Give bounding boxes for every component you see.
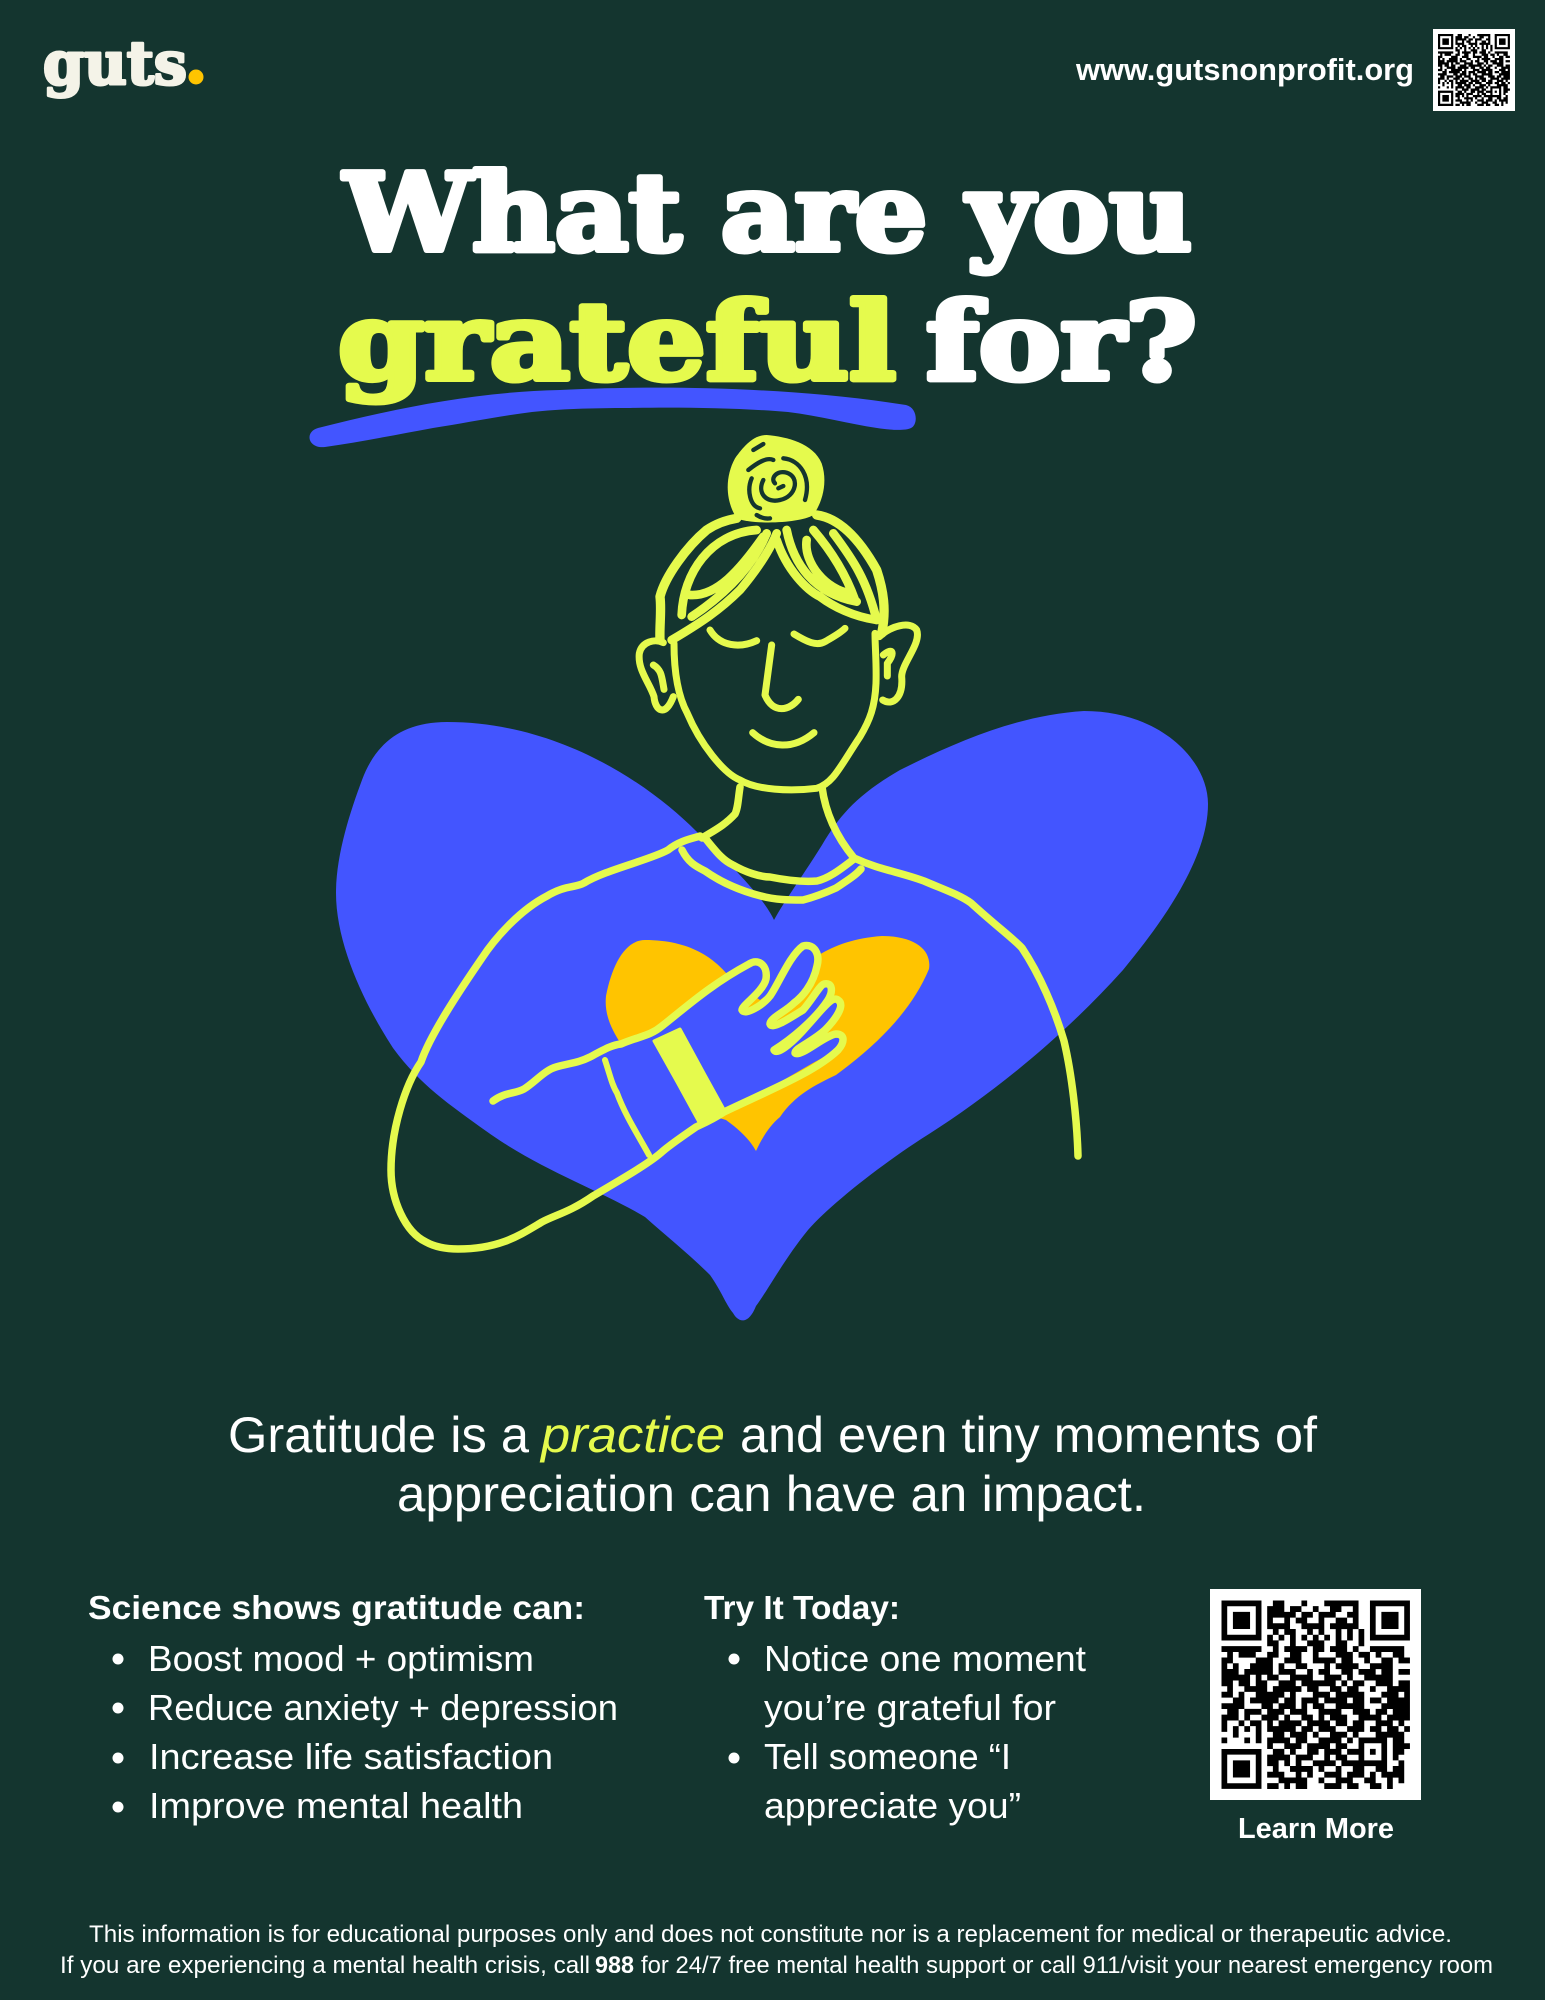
nose <box>765 645 798 709</box>
learn more label: Learn More <box>1238 1813 1394 1845</box>
hand fill <box>605 946 843 1155</box>
big blue heart <box>336 711 1208 1320</box>
panel: science shows gratitude can: Boost mood + optimism <box>148 1638 534 1679</box>
tagline: and even tiny moments of <box>740 1407 1317 1463</box>
panel: science shows gratitude can: Science shows gratitude can: <box>88 1589 585 1626</box>
footer disclaimer: 988 <box>595 1952 634 1979</box>
title <box>338 151 1197 405</box>
panel: science shows gratitude can: Improve mental health <box>149 1785 523 1826</box>
arm, hand and fingers <box>391 836 843 1249</box>
neck and right shoulder <box>702 787 1078 1156</box>
title: for? <box>926 280 1197 405</box>
right ear <box>879 625 917 702</box>
left ear <box>639 641 673 710</box>
footer disclaimer: If you are experiencing a mental health crisis, call <box>60 1952 590 1979</box>
collar <box>682 838 861 900</box>
footer disclaimer: This information is for educational purposes only and does not constitute nor is a replacement for medical or therapeutic advice. <box>89 1921 1452 1948</box>
title: What are you <box>343 151 1192 276</box>
left eye <box>710 630 757 645</box>
website url: www.gutsnonprofit.org <box>1075 52 1414 87</box>
tagline <box>228 1407 1317 1522</box>
hairline and strands <box>672 530 877 640</box>
panel: try it today: you’re grateful for <box>764 1687 1056 1728</box>
small qr code <box>1433 29 1515 111</box>
panel: try it today: Try It Today: <box>704 1589 900 1626</box>
title underline swoosh <box>310 388 916 447</box>
hair bun <box>728 435 824 522</box>
head <box>639 435 917 790</box>
small orange heart <box>606 936 929 1151</box>
sleeve cuff <box>605 1029 726 1155</box>
panel: try it today: appreciate you” <box>764 1785 1021 1826</box>
tagline: practice <box>539 1407 725 1463</box>
hair outline <box>660 515 884 640</box>
tagline: Gratitude is a <box>228 1407 529 1463</box>
panel: try it today <box>704 1589 1086 1826</box>
large qr code <box>1210 1589 1421 1800</box>
right eye <box>794 628 845 644</box>
panel: science shows gratitude can <box>88 1589 618 1826</box>
face outline <box>674 633 876 790</box>
tagline: appreciation can have an impact. <box>397 1466 1146 1522</box>
panel: science shows gratitude can: Reduce anxiety + depression <box>148 1687 618 1728</box>
panel: try it today: Notice one moment <box>764 1638 1086 1679</box>
panel: try it today: Tell someone “I <box>764 1736 1011 1777</box>
mouth <box>753 733 814 745</box>
person line drawing <box>391 787 1078 1249</box>
footer disclaimer: for 24/7 free mental health support or call 911/visit your nearest emergency room <box>641 1952 1493 1979</box>
logo: guts.: guts <box>43 29 187 99</box>
footer disclaimer <box>60 1921 1493 1979</box>
panel: science shows gratitude can: Increase life satisfaction <box>149 1736 553 1777</box>
title: grateful <box>338 280 896 405</box>
